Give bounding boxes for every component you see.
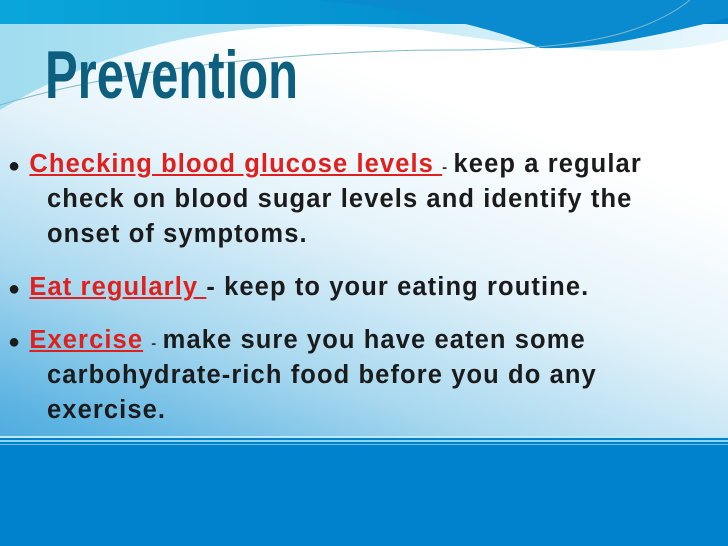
bullet list: carbohydrate-rich food before you do any [47,361,597,389]
title: Prevention [45,37,298,113]
bullet 2: ● Eat regularly - keep to your eating routine. [8,273,589,301]
top wave band [0,0,728,110]
bottom band [0,436,728,546]
bullet list [8,150,642,424]
bullet 1: ● Checking blood glucose levels - keep a regular [8,150,642,178]
bullet list: exercise. [47,396,166,424]
bullet list: onset of symptoms. [47,220,308,248]
bullet 3: ● Exercise - make sure you have eaten some [8,326,586,354]
bullet list: check on blood sugar levels and identify the [47,185,632,213]
